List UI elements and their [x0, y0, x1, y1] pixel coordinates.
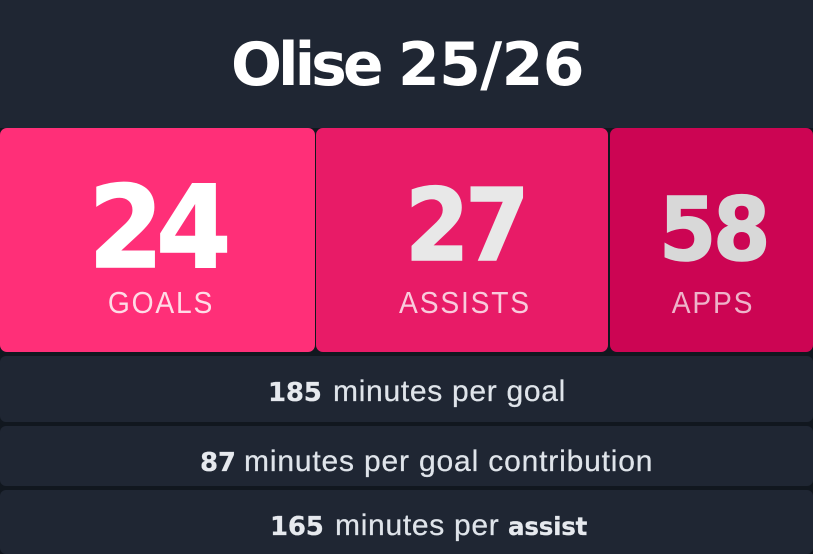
minutes per assist text [270, 509, 587, 542]
minutes per assist text: minutes per [335, 509, 499, 542]
goals label: GOALS [108, 285, 214, 320]
apps number: 58 [659, 179, 767, 281]
row: minutes per goal [0, 356, 813, 422]
title [231, 30, 584, 100]
row: minutes per assist [0, 490, 813, 554]
minutes per goal text: 185 [268, 378, 322, 408]
minutes per goal contribution text: 87 [200, 448, 236, 478]
assists label: ASSISTS [399, 285, 531, 320]
row: minutes per goal contribution [0, 426, 813, 486]
title: 25/26 [398, 30, 584, 100]
goals number: 24 [88, 161, 224, 294]
minutes per assist text: assist [508, 512, 587, 541]
minutes per goal contribution text: minutes per goal contribution [244, 445, 653, 478]
title: Olise [231, 30, 380, 100]
minutes per assist text: 165 [270, 512, 324, 542]
title bar [0, 0, 813, 128]
panel: goals [0, 128, 315, 352]
apps label: APPS [672, 285, 754, 320]
assists number: 27 [405, 167, 525, 284]
minutes per goal text: minutes per goal [333, 375, 566, 408]
panel: apps [610, 128, 813, 352]
panel: assists [316, 128, 608, 352]
